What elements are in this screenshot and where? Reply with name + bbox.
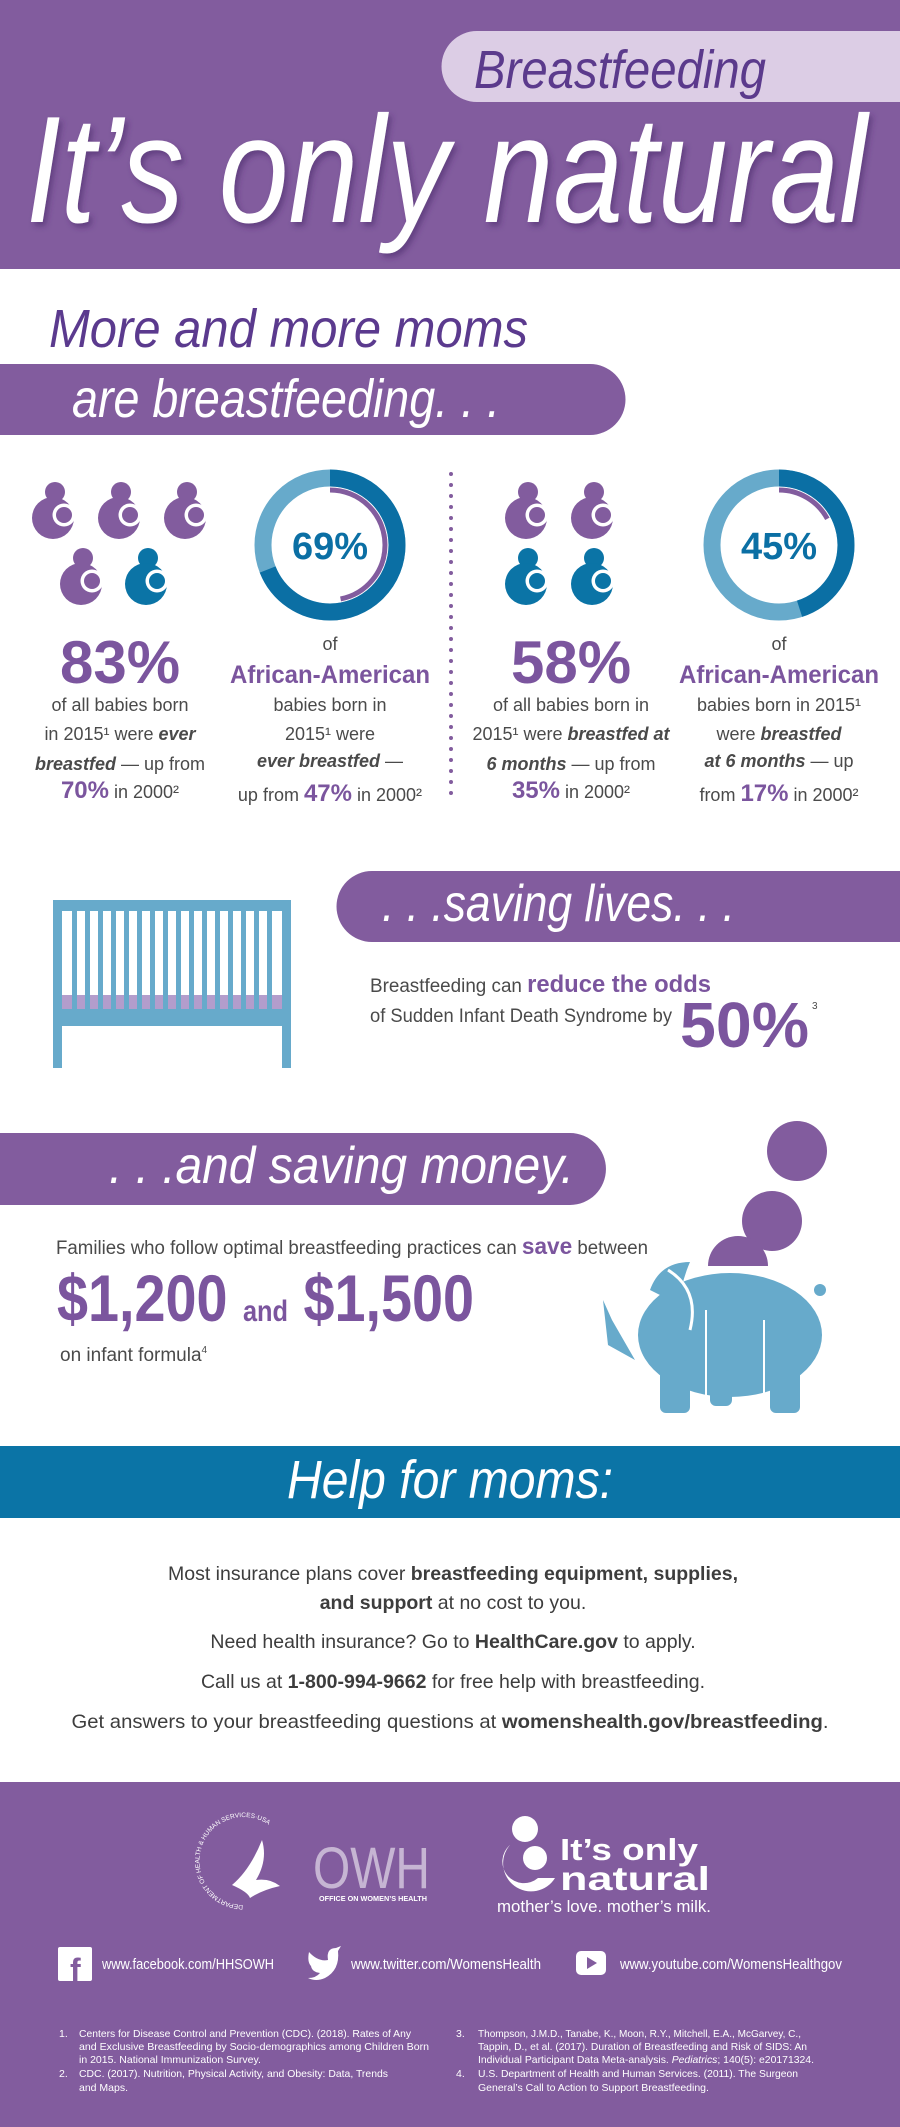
stat text: 45% African-American: were breastfed (715, 724, 843, 744)
stat text: 83% (35, 629, 205, 804)
banner: help for moms (0, 1446, 900, 1518)
heading band: saving lives (336, 871, 900, 942)
stat text: 69% African-American: African-American (230, 661, 430, 689)
donut: 45%: 45% (741, 526, 817, 568)
stat text: 45% African-American (679, 634, 879, 807)
icon: piggy bank with coins (603, 1121, 827, 1413)
references: in 2015. National Immunization Survey. (79, 2054, 261, 2066)
pill: Breastfeeding (442, 31, 900, 102)
stat text: 83%: 70% in 2000² (61, 777, 179, 804)
text: help lines: Call us at 1-800-994-9662 for free help with breastfeeding. (201, 1671, 705, 1693)
references: Centers for Disease Control and Prevention (CDC). (2018). Rates of Any (79, 2028, 412, 2040)
heading: more and more moms: are breastfeeding. . . (72, 369, 500, 429)
stat text: 69% African-American: ever breastfed — (257, 751, 403, 771)
text: SIDS 50% (370, 971, 818, 1061)
stat text: 69% African-American: babies born in (273, 695, 387, 715)
text: savings: 4 (202, 1345, 208, 1356)
stat text: 45% African-American: of (771, 634, 788, 654)
stat text: 58% (472, 629, 671, 804)
donut: 45% (712, 478, 846, 612)
text: savings: on infant formula (60, 1345, 202, 1366)
logo: HHS seal: DEPARTMENT OF HEALTH & HUMAN SERVICES·USA (195, 1812, 270, 1910)
text: SIDS 50%: 50% (680, 989, 809, 1061)
references: Thompson, J.M.D., Tanabe, K., Moon, R.Y., Mitchell, E.A., McGarvey, C., (478, 2028, 801, 2040)
social links: www.twitter.com/WomensHealth (350, 1956, 541, 1973)
social links: www.youtube.com/WomensHealthgov (619, 1956, 842, 1973)
heading band: saving money (0, 1133, 606, 1205)
donut: 69% (263, 478, 397, 612)
logo: It's only natural: natural (560, 1860, 710, 1897)
stat text: 45% African-American: babies born in 2015¹ (697, 695, 861, 715)
references: Individual Participant Data Meta-analysis. Pediatrics; 140(5): e20171324. (478, 2054, 814, 2066)
stat text: 45% African-American: at 6 months — up (704, 751, 854, 771)
text: help lines (72, 1563, 828, 1733)
text: help lines: Most insurance plans cover breastfeeding equipment, supplies, (168, 1563, 738, 1585)
stat text: 83%: 83% (60, 629, 180, 696)
text: savings: Families who follow optimal breastfeeding practices can save between (56, 1233, 648, 1259)
references (59, 2028, 814, 2094)
heading band: saving money: . . .and saving money. (109, 1137, 574, 1195)
stat text: 69% African-American: 2015¹ were (285, 724, 375, 744)
stat text: 58%: of all babies born in (493, 695, 649, 715)
heading band: saving lives: . . .saving lives. . . (382, 875, 735, 933)
logo: OWH: OFFICE ON WOMEN’S HEALTH (319, 1894, 427, 1903)
heading: more and more moms (0, 299, 626, 435)
text: SIDS 50%: 3 (812, 1001, 818, 1012)
references: 3. (456, 2028, 465, 2040)
logo: It's only natural: It’s only (560, 1832, 699, 1867)
references: U.S. Department of Health and Human Services. (2011). The Surgeon (478, 2068, 798, 2080)
text: help lines: Need health insurance? Go to HealthCare.gov to apply. (210, 1631, 696, 1653)
social links: f (70, 1952, 81, 1988)
social links (58, 1946, 842, 1988)
stat text: 58%: 35% in 2000² (512, 777, 630, 804)
divider dotted (449, 474, 453, 802)
donut: 69%: 69% (292, 526, 368, 568)
text: help lines: and support at no cost to you. (320, 1592, 586, 1614)
stat text: 45% African-American: African-American (679, 661, 879, 689)
stat text: 58%: 58% (511, 629, 631, 696)
stat text: 69% African-American (230, 634, 430, 807)
references: 1. (59, 2028, 68, 2040)
stat text: 58%: 6 months — up from (486, 754, 656, 774)
logo: It's only natural (497, 1816, 711, 1916)
header banner (0, 0, 900, 269)
stat text: 83%: of all babies born (51, 695, 189, 715)
references: 2. (59, 2068, 68, 2080)
logo: OWH: OWH (313, 1836, 430, 1901)
stat text: 58%: 2015¹ were breastfed at (472, 724, 671, 744)
social links: www.facebook.com/HHSOWH (101, 1956, 274, 1973)
text: savings (56, 1233, 648, 1366)
stat text: 69% African-American: of (322, 634, 339, 654)
text: help lines: Get answers to your breastfeeding questions at womenshealth.gov/breastfeeding . (72, 1711, 828, 1733)
text: savings: $1,200 and $1,500 (57, 1261, 474, 1335)
logo: It's only natural: mother’s love. mother’s milk. (497, 1897, 711, 1916)
stat text: 83%: breastfed — up from (35, 754, 205, 774)
heading: more and more moms: More and more moms (49, 299, 528, 359)
references: General’s Call to Action to Support Breastfeeding. (478, 2082, 709, 2094)
banner: help for moms: Help for moms: (287, 1450, 613, 1510)
stat text: 69% African-American: up from 47% in 2000² (238, 780, 422, 807)
stat text: 83%: in 2015¹ were ever (44, 724, 197, 744)
pill: Breastfeeding: Breastfeeding (474, 40, 766, 100)
references: Tappin, D., et al. (2017). Duration of Breastfeeding and Risk of SIDS: An (478, 2041, 807, 2053)
footer (0, 1782, 900, 2127)
references: CDC. (2017). Nutrition, Physical Activity, and Obesity: Data, Trends (79, 2068, 388, 2080)
stat text: 45% African-American: from 17% in 2000² (699, 780, 859, 807)
icon: crib (53, 900, 291, 1068)
references: 4. (456, 2068, 465, 2080)
icon group: 58% moms (505, 482, 614, 605)
icon group: 83% moms (32, 482, 208, 605)
references: and Exclusive Breastfeeding by Socio-demographics among Children Born (79, 2041, 429, 2053)
text: SIDS 50%: of Sudden Infant Death Syndrome by (370, 1006, 672, 1027)
text: SIDS 50%: Breastfeeding can reduce the odds (370, 971, 711, 998)
references: and Maps. (79, 2082, 128, 2094)
